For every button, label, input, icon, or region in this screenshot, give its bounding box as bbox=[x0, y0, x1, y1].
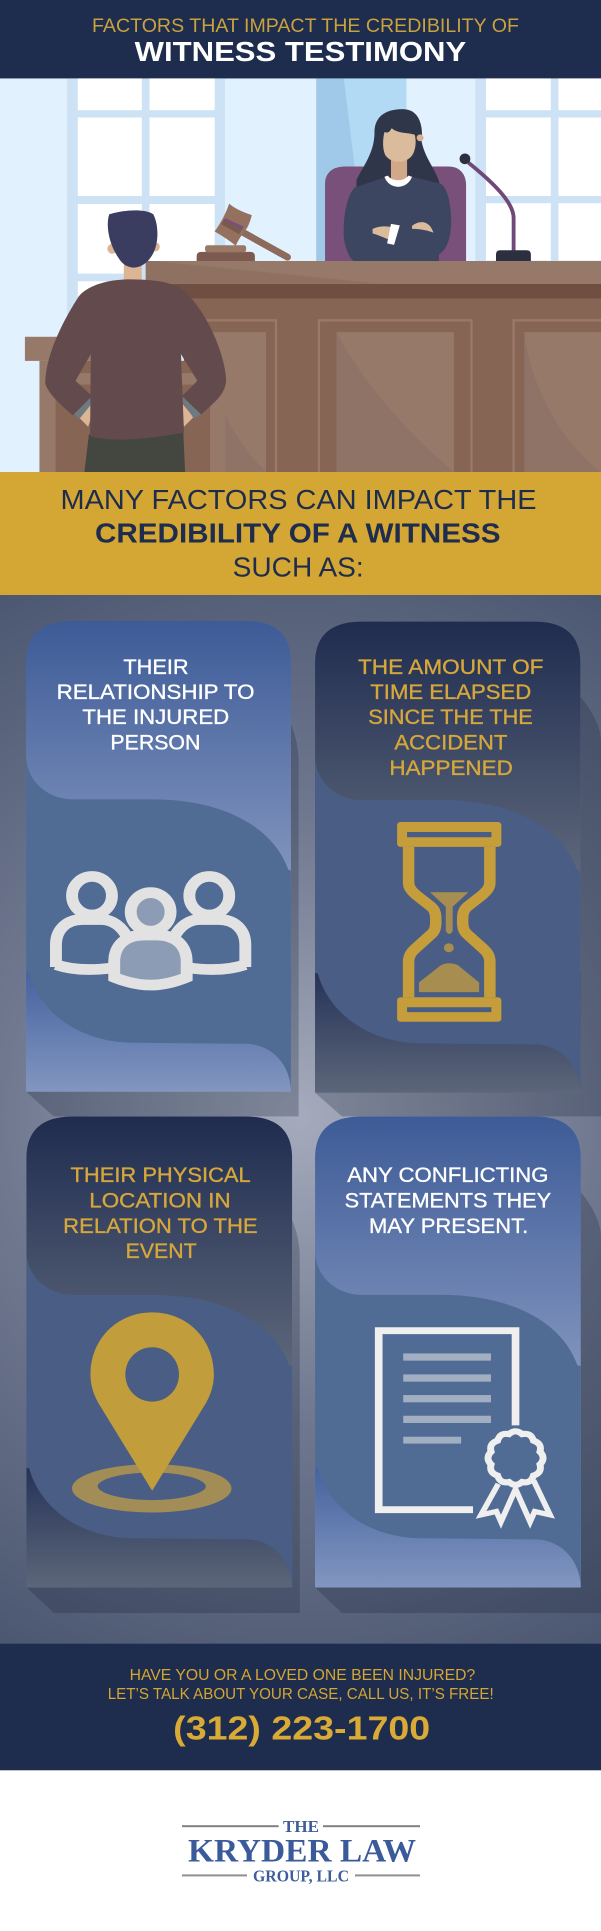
left window bbox=[67, 78, 225, 385]
witness stand bbox=[25, 337, 210, 473]
bench panel left bbox=[192, 320, 276, 473]
card text: STATEMENTS THEY bbox=[345, 1189, 551, 1212]
factors panel background bbox=[0, 595, 601, 1644]
courtroom illustration bbox=[0, 78, 601, 473]
card: relationship bbox=[26, 621, 299, 1116]
icon: hourglass bbox=[397, 822, 501, 1022]
title banner bbox=[0, 0, 601, 79]
card text: LOCATION IN bbox=[89, 1189, 231, 1212]
icon: three people bbox=[56, 876, 245, 985]
card text bbox=[57, 656, 254, 754]
bench panel center bbox=[319, 320, 471, 473]
cta line 1: HAVE YOU OR A LOVED ONE BEEN INJURED? bbox=[130, 1667, 476, 1684]
title line: witness testimony: WITNESS TESTIMONY bbox=[135, 36, 467, 67]
card text bbox=[63, 1164, 258, 1263]
judge bbox=[344, 109, 451, 261]
intro line 2: CREDIBILITY OF A WITNESS bbox=[95, 518, 501, 548]
card text: ANY CONFLICTING bbox=[347, 1164, 548, 1187]
card text: TIME ELAPSED bbox=[370, 681, 531, 704]
intro line 3: SUCH AS: bbox=[233, 552, 364, 583]
card: conflicting statements bbox=[315, 1117, 601, 1613]
card text: SINCE THE THE bbox=[368, 706, 533, 729]
gavel bbox=[197, 204, 287, 261]
card text: RELATIONSHIP TO bbox=[57, 681, 254, 704]
intro band bbox=[0, 472, 601, 595]
law firm logo: THE bbox=[283, 1817, 319, 1836]
card text: THEIR PHYSICAL bbox=[70, 1164, 251, 1187]
phone number: (312) 223-1700 bbox=[173, 1710, 430, 1746]
witness man bbox=[45, 210, 226, 473]
icon: certificate bbox=[379, 1331, 550, 1522]
card: time elapsed bbox=[315, 622, 601, 1116]
card text: THE INJURED bbox=[82, 706, 229, 729]
card text: ACCIDENT bbox=[394, 732, 508, 754]
right window bbox=[475, 78, 601, 261]
judge bench bbox=[146, 261, 601, 473]
card text: EVENT bbox=[126, 1240, 197, 1263]
card text: THEIR bbox=[123, 656, 189, 679]
card text: PERSON bbox=[110, 732, 200, 754]
microphone bbox=[460, 153, 531, 261]
law firm logo: GROUP, LLC bbox=[253, 1867, 349, 1886]
card text: RELATION TO THE bbox=[63, 1215, 258, 1238]
card text bbox=[358, 656, 544, 780]
card text bbox=[345, 1164, 551, 1238]
card: physical location bbox=[26, 1117, 300, 1613]
law firm logo bbox=[182, 1817, 420, 1886]
call to action banner bbox=[0, 1644, 601, 1770]
bench panel right bbox=[514, 320, 601, 473]
card text: MAY PRESENT. bbox=[369, 1215, 528, 1238]
curtain bbox=[316, 78, 406, 261]
cta line 2: LET’S TALK ABOUT YOUR CASE, CALL US, IT’S FREE! bbox=[108, 1686, 494, 1703]
intro line 1: MANY FACTORS CAN IMPACT THE bbox=[60, 484, 536, 515]
judge chair bbox=[325, 166, 466, 261]
law firm logo: KRYDER LAW bbox=[188, 1834, 416, 1870]
card text: THE AMOUNT OF bbox=[358, 656, 544, 679]
card text: HAPPENED bbox=[389, 757, 513, 780]
title line: factors: FACTORS THAT IMPACT THE CREDIBILITY OF bbox=[92, 16, 519, 37]
icon: location pin bbox=[72, 1312, 232, 1512]
